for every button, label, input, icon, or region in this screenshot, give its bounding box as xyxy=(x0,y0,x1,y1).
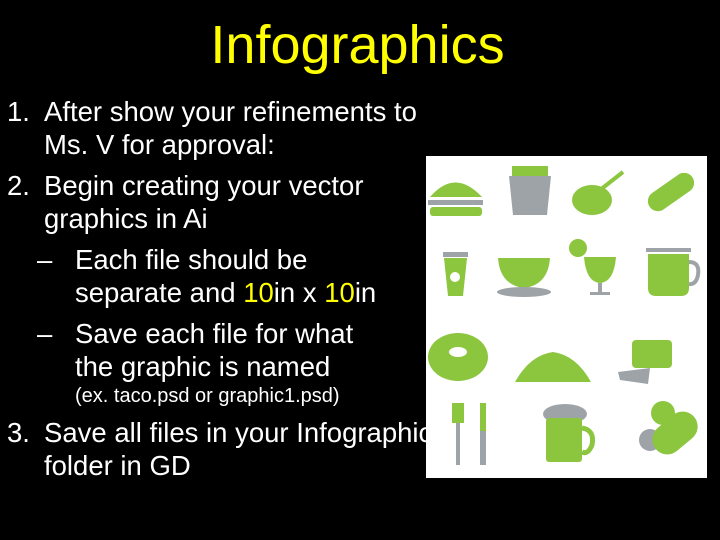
icon: chicken xyxy=(572,172,623,215)
text block: instructions: graphics in Ai xyxy=(44,203,208,234)
text block: instructions: 2. xyxy=(7,170,30,201)
icon: cocktail xyxy=(569,239,616,295)
panel: food icons xyxy=(426,156,707,478)
text block: instructions: Save each file for what xyxy=(75,318,353,349)
icon: donut xyxy=(428,333,488,381)
text block: instructions: – xyxy=(37,244,52,275)
icon: burger xyxy=(428,182,483,216)
title: Infographics xyxy=(210,15,505,75)
text block: instructions: Save all files in your Infographics xyxy=(44,417,446,448)
icon: bread xyxy=(618,340,672,384)
text block: instructions: Begin creating your vector xyxy=(44,170,363,201)
text block: instructions: Ms. V for approval: xyxy=(44,129,275,160)
text block: instructions: After show your refinements to xyxy=(44,96,417,127)
text block: instructions: folder in GD xyxy=(44,450,191,481)
icon: beer xyxy=(543,404,593,462)
text block: instructions: – xyxy=(37,318,52,349)
icon: bread loaf xyxy=(639,401,704,461)
icon: hotdog xyxy=(644,169,698,215)
text block: instructions: 1. xyxy=(7,96,30,127)
text block: instructions: Each file should be xyxy=(75,244,307,275)
text block: instructions: 3. xyxy=(7,417,30,448)
text block: instructions: separate and 10in x 10in xyxy=(75,277,376,308)
text block: instructions: the graphic is named xyxy=(75,351,330,382)
icon: tea mug xyxy=(646,248,698,296)
icon: croissant xyxy=(515,352,591,382)
icon: fork and knife xyxy=(452,403,486,465)
icon: soda cup xyxy=(443,252,468,296)
text block: instructions: (ex. taco.psd or graphic1.psd) xyxy=(75,385,340,407)
icon: coffee xyxy=(497,258,551,297)
icon: fries xyxy=(509,166,551,215)
